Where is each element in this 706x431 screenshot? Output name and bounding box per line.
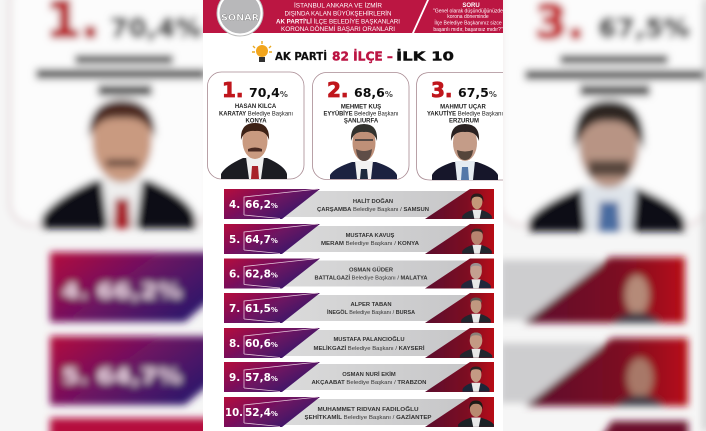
row: rank 10: 10. — [225, 407, 243, 419]
title — [275, 48, 454, 64]
row: rank 9: 57,8% — [245, 372, 278, 384]
header text: İSTANBUL ANKARA VE İZMİR — [294, 0, 382, 10]
card: rank 1: KONYA — [245, 118, 267, 124]
header text: DIŞINDA KALAN BÜYÜKŞEHİRLERİN — [284, 8, 392, 17]
question text: SORU — [462, 3, 480, 9]
row: rank 8: 60,6% — [245, 338, 278, 350]
row: rank 9: 9. — [229, 372, 240, 384]
card: rank 1 — [208, 72, 304, 179]
row: rank 10: MUHAMMET RIDVAN FADILOĞLU — [318, 405, 418, 413]
row: rank 8: 8. — [229, 338, 240, 350]
icon: AK Parti bulb — [252, 41, 272, 62]
row: rank 7: ALPER TABAN — [350, 302, 392, 308]
row: rank 4: 4. — [229, 199, 240, 211]
portrait: Mustafa Kavuş — [462, 229, 492, 254]
card: rank 1: KARATAY Belediye Başkanı — [219, 112, 293, 118]
row: rank 7: 7. — [229, 303, 240, 315]
card: rank 1: 1. — [222, 78, 244, 102]
question text: İlçe Belediye Başkanınız sizce — [434, 20, 502, 26]
row: rank 5: 64,7% — [245, 234, 278, 246]
panel: main infographic — [203, 0, 503, 431]
row: rank 7: İNEGÖL Belediye Başkanı / BURSA — [327, 309, 416, 316]
header banner — [203, 0, 503, 33]
portrait: Osman Güder — [461, 263, 491, 288]
card: rank 3: 3. — [431, 78, 453, 102]
row: rank 5: MERAM Belediye Başkanı / KONYA — [321, 241, 420, 247]
question text: başarılı mıdır, başarısız mıdır?" — [433, 27, 503, 33]
panel: blurred left backdrop: 70,4% — [110, 14, 202, 44]
row: rank 5 — [224, 224, 494, 254]
row: rank 4: ÇARŞAMBA Belediye Başkanı / SAMSUN — [317, 207, 429, 213]
question text: "Genel olarak düşündüğünüzde — [433, 8, 503, 14]
row: rank 10 — [224, 397, 494, 427]
header text — [276, 0, 400, 33]
card: rank 2: 2. — [327, 78, 349, 102]
logo: SONAR — [217, 0, 263, 36]
row: rank 4: HALİT DOĞAN — [353, 197, 393, 205]
row: rank 5: MUSTAFA KAVUŞ — [346, 233, 395, 239]
header text: AK PARTİ'Lİ İLÇE BELEDİYE BAŞKANLARI — [276, 16, 400, 25]
title: İLK 10 — [396, 48, 454, 64]
row: rank 8 — [224, 328, 494, 358]
card: rank 1: HASAN KILCA — [235, 104, 277, 110]
row: rank 6: 62,8% — [245, 268, 278, 280]
card: rank 1: 70,4% — [249, 85, 288, 100]
card: rank 3: YAKUTİYE Belediye Başkanı — [427, 110, 503, 118]
row: rank 4: 66,2% — [245, 199, 278, 211]
portrait: Hasan Kılca — [221, 123, 287, 179]
row: rank 5: 5. — [229, 234, 240, 246]
row: rank 6: BATTALGAZİ Belediye Başkanı / MALATYA — [314, 274, 428, 282]
row: rank 8: MUSTAFA PALANCIOĞLU — [333, 335, 405, 343]
row: rank 10: ŞEHİTKAMİL Belediye Başkanı / GAZİANTEP — [304, 414, 432, 421]
card: rank 2: MEHMET KUŞ — [341, 104, 381, 110]
card: rank 2: ŞANLIURFA — [344, 118, 379, 124]
portrait: Mahmut Uçar — [432, 124, 498, 180]
portrait: Halit Doğan — [462, 194, 492, 219]
card: rank 2 — [312, 72, 409, 180]
question text — [433, 3, 503, 33]
title: AK PARTİ — [275, 49, 327, 63]
row: rank 8: MELİKGAZİ Belediye Başkanı / KAYSERİ — [314, 345, 425, 352]
row: rank 6: 6. — [229, 268, 240, 280]
row: rank 4 — [224, 189, 494, 219]
question text: korona döneminde — [447, 14, 489, 20]
title: 82 İLÇE – — [332, 48, 393, 64]
row: rank 10: 52,4% — [245, 407, 278, 419]
card: rank 2: 68,6% — [354, 85, 393, 100]
logo: SONAR: SONAR — [221, 14, 259, 24]
row: rank 9: AKÇAABAT Belediye Başkanı / TRABZON — [312, 380, 426, 386]
card: rank 3: 67,5% — [458, 85, 497, 100]
panel: blurred left backdrop — [10, 0, 220, 431]
header text: KORONA DÖNEMİ BAŞARI ORANLARI — [281, 24, 395, 33]
portrait: Alper Taban — [461, 298, 491, 323]
row: rank 7: 61,5% — [245, 303, 278, 315]
portrait: Osman Nuri Ekim — [462, 367, 490, 392]
panel: blurred right backdrop: 67,5% — [598, 14, 690, 44]
portrait: Mustafa Palancıoğlu — [460, 333, 492, 358]
row: rank 6 — [224, 258, 494, 288]
card: rank 3 — [416, 72, 503, 180]
card: rank 3: ERZURUM — [449, 118, 479, 124]
row: rank 7 — [224, 293, 494, 323]
row: rank 6: OSMAN GÜDER — [349, 266, 394, 274]
card: rank 2: EYYÜBİYE Belediye Başkanı — [324, 110, 399, 118]
portrait: Muhammet Rıdvan Fadıloğlu — [458, 401, 494, 427]
portrait: Mehmet Kuş — [330, 124, 397, 179]
card: rank 3: MAHMUT UÇAR — [440, 104, 486, 110]
row: rank 9: OSMAN NURİ EKİM — [342, 371, 396, 378]
row: rank 9 — [224, 362, 494, 392]
panel: blurred left backdrop: 4. 66,2% — [62, 279, 182, 303]
panel: blurred right backdrop — [500, 0, 706, 431]
panel: blurred left backdrop: 5. 64,7% — [62, 364, 182, 388]
